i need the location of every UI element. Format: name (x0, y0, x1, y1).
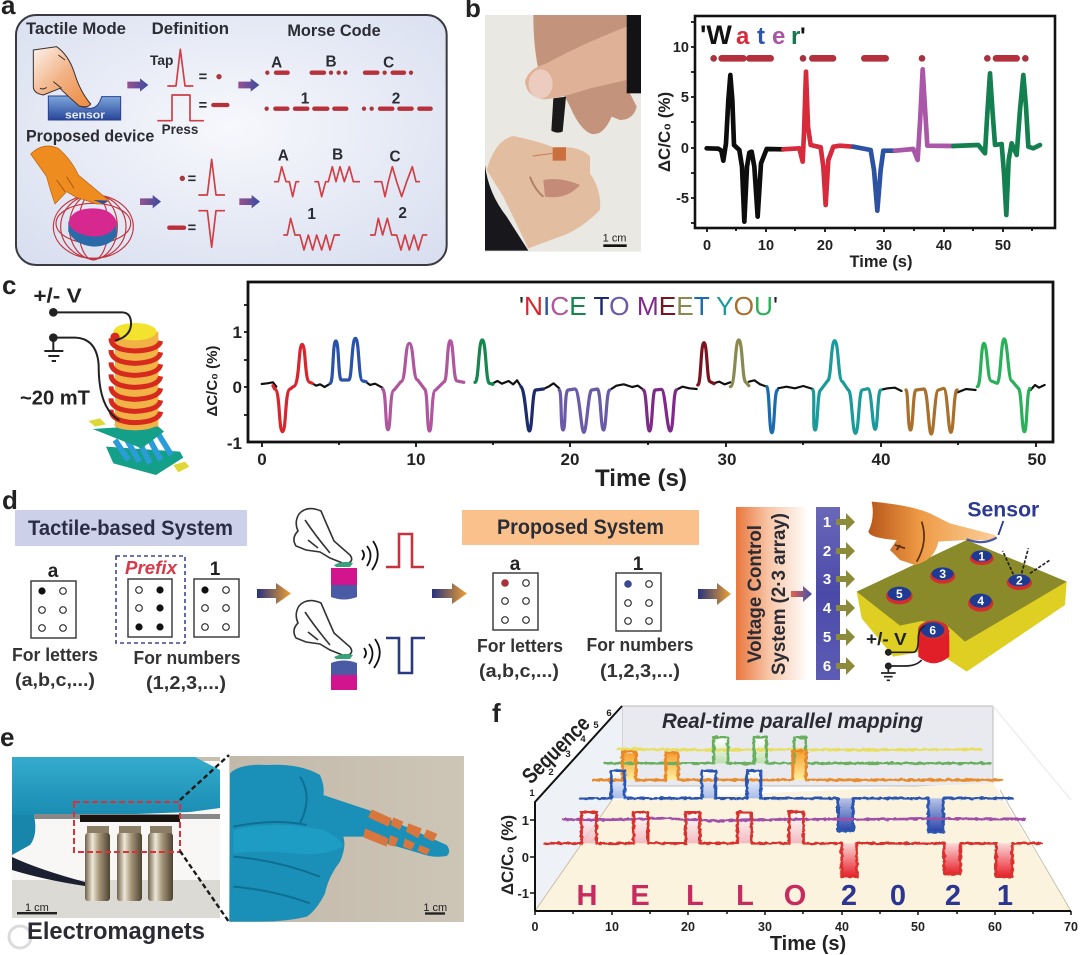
panel d: press and tap input illustration (294, 509, 425, 690)
panel d: proposed system (462, 510, 699, 681)
x tick labels: 40 (872, 450, 890, 469)
panel label d: d (2, 485, 18, 515)
proposed device definitions (169, 159, 225, 247)
Morse code dots and dashes: B (325, 54, 337, 71)
sequence tick labels: 1 (529, 788, 535, 799)
heading: Proposed device (26, 127, 154, 146)
panel d: voltage control system (736, 507, 809, 680)
sequence tick labels: 4 (580, 734, 586, 745)
x tick labels: 10 (407, 450, 425, 469)
y tick labels: 0 (233, 378, 242, 397)
sensors 1 to 5: 5 (896, 587, 903, 601)
letter a grid (493, 554, 538, 630)
panel d: channel bar 1 to 6 (816, 507, 855, 680)
floor edges (535, 790, 1071, 911)
y axis title: ΔC/C₀ (%) (498, 815, 517, 895)
signal traces (545, 737, 1041, 877)
chart frame (695, 16, 1055, 228)
arrow (257, 583, 291, 604)
base actuator (88, 418, 189, 475)
number labels 2021 (841, 880, 1013, 912)
x tick labels: 30 (758, 920, 772, 934)
numbers caption: For numbers (586, 634, 694, 655)
x axis tick labels: 50 (995, 238, 1011, 254)
Morse code dots and dashes: A (271, 54, 282, 71)
y tick labels (227, 323, 242, 453)
signal traces (707, 69, 1040, 222)
axis ticks (530, 820, 1071, 915)
word title: r (791, 23, 800, 50)
numbers range: (1,2,3,...) (146, 672, 226, 693)
x tick labels (532, 920, 1078, 934)
voltage label: +/- V (33, 285, 82, 307)
icon: magnet with field lines and hand (31, 146, 133, 260)
axes (535, 706, 1071, 911)
sequence tick labels: 3 (565, 749, 571, 760)
banner (15, 510, 247, 546)
panel b: hand photograph (485, 15, 641, 252)
x axis title: Time (s) (850, 253, 912, 271)
letter a grid: a (48, 561, 59, 582)
word labels HELLO: L (686, 880, 704, 912)
y axis tick labels: -5 (676, 191, 689, 207)
proposed device definitions: = (188, 221, 196, 237)
sensors 1 to 5: 2 (1016, 574, 1023, 588)
panel f: real-time mapping chart (498, 706, 1078, 955)
y axis title: ΔC/C₀ (%) (655, 92, 674, 172)
sensor 6 cylinder (918, 621, 949, 663)
x tick labels: 20 (681, 920, 695, 934)
headings (26, 19, 381, 40)
tap and press definitions (150, 49, 227, 137)
word title: 'NICE TO MEET YOU' (519, 291, 778, 321)
proposed Morse signals: A (278, 148, 289, 165)
sensors 1 to 5 (886, 549, 1032, 612)
panel d: channel bar 1 to 6: 4 (823, 600, 832, 617)
y tick labels: -1 (227, 434, 242, 453)
banner text: Proposed System (497, 516, 664, 539)
banner (462, 510, 699, 545)
proposed Morse signals: 1 (307, 206, 316, 223)
caption: Electromagnets (27, 918, 205, 945)
Morse code dots and dashes (264, 54, 431, 111)
letters caption: For letters (12, 644, 98, 665)
chart title: Real-time parallel mapping (662, 710, 923, 733)
zoom callout lines (180, 755, 229, 922)
tap and press definitions: Tap (150, 52, 173, 68)
word title: e (772, 23, 785, 50)
panel c: electromagnet device (20, 285, 189, 475)
number labels 2021: 1 (997, 880, 1013, 912)
Morse code dots and dashes: 1 (301, 90, 310, 107)
y tick labels: -1 (517, 886, 529, 901)
arrow (140, 195, 161, 208)
y tick labels: 1 (233, 323, 242, 342)
lower magnet (331, 654, 357, 690)
x tick labels: 50 (1028, 450, 1046, 469)
letters range: (a,b,c,...) (15, 669, 95, 690)
sensor label: Sensor (967, 498, 1039, 522)
scale bar: 1 cm (603, 233, 626, 245)
scale bar (17, 902, 57, 914)
x tick labels: 30 (718, 450, 736, 469)
x axis tick labels: 20 (817, 238, 833, 254)
number 1 grid (616, 554, 661, 631)
word labels HELLO: O (784, 880, 806, 912)
x tick labels (257, 450, 1046, 469)
x axis tick labels: 10 (758, 238, 774, 254)
x tick labels: 10 (605, 920, 619, 934)
sensor 6 cylinder: 6 (929, 623, 936, 637)
number labels 2021: 2 (945, 880, 961, 912)
proposed Morse signals: B (332, 147, 343, 164)
icon: pointing hand (868, 502, 996, 565)
icon: tactile hand on sensor: sensor (65, 109, 106, 121)
panel c: NICE TO MEET YOU chart (204, 282, 1053, 492)
number 1 grid: 1 (633, 554, 644, 575)
x axis title: Time (s) (595, 465, 687, 492)
letters caption: For letters (477, 635, 563, 656)
sequence tick labels: 6 (606, 708, 612, 719)
word title: 'W (700, 20, 732, 50)
negative pulse (386, 638, 425, 673)
proposed device definitions: = (188, 171, 196, 187)
number labels 2021: 2 (841, 880, 857, 912)
headings: Tactile Mode (26, 19, 126, 38)
axis ticks (244, 305, 1036, 447)
panel d: channel bar 1 to 6: 3 (823, 571, 831, 588)
panel d: tactile-based system (12, 510, 247, 693)
numbers range: (1,2,3,...) (600, 660, 680, 681)
word title: ' (800, 23, 806, 50)
x tick labels: 20 (561, 450, 579, 469)
sequence tick labels: 2 (548, 767, 554, 778)
word labels HELLO: H (577, 880, 597, 912)
wiring and ground (44, 309, 131, 420)
arrow (791, 586, 812, 602)
x tick labels: 0 (532, 920, 539, 934)
icon: tactile hand on sensor (33, 47, 121, 121)
number labels 2021: 0 (890, 880, 906, 912)
y axis tick labels: 0 (681, 141, 689, 157)
icon: signal waves (362, 541, 378, 570)
panel d: channel bar 1 to 6: 6 (823, 658, 831, 675)
panel label e: e (0, 722, 14, 752)
y tick labels: 1 (522, 813, 529, 828)
positive pulse (386, 534, 424, 567)
panel background (16, 15, 447, 265)
sensors 1 to 5: 4 (977, 594, 984, 608)
x tick labels: 40 (835, 920, 849, 934)
arrow (239, 195, 260, 208)
scale bar: 1 cm (25, 902, 49, 914)
panel d: voltage control system: Voltage Control (744, 525, 766, 663)
left wall (535, 706, 622, 911)
tap and press definitions: Press (162, 121, 199, 137)
x axis tick labels: 30 (876, 238, 892, 254)
red dashed highlight (74, 802, 180, 852)
proposed Morse signals: C (389, 148, 401, 165)
electromagnet cylinders (85, 826, 173, 901)
finger crease (895, 522, 924, 562)
number 1 grid: 1 (210, 559, 221, 580)
letters range: (a,b,c,...) (479, 660, 559, 681)
Morse code dots and dashes: C (383, 54, 394, 71)
back wall (622, 706, 993, 786)
floor (535, 783, 1071, 911)
coil and core (110, 323, 161, 430)
icon: signal waves (364, 639, 380, 668)
copper electrodes (363, 809, 437, 855)
wiring and ground (881, 626, 925, 680)
x axis tick labels: 40 (936, 238, 952, 254)
watermark (9, 926, 31, 948)
voltage label: +/- V (866, 629, 907, 649)
x axis title: Time (s) (770, 933, 846, 955)
panel d: voltage control system: System (2·3 array) (768, 513, 790, 675)
sensors 1 to 5: 3 (939, 567, 946, 581)
right perspective edge (993, 706, 1071, 800)
prefix grid: Prefix (125, 558, 178, 578)
tap and press definitions: = (199, 70, 207, 86)
sensor patch on fingertip (967, 538, 997, 542)
sensor pointer (998, 521, 1003, 535)
panel e: gloved finger photo (229, 756, 464, 922)
headings: Definition (152, 19, 229, 38)
x axis tick labels (703, 238, 1011, 254)
banner text: Tactile-based System (28, 517, 233, 540)
panel d: channel bar 1 to 6: 5 (823, 629, 831, 646)
icon: upper hand (294, 509, 352, 564)
y axis tick labels: 10 (673, 40, 689, 56)
axis ticks (691, 22, 1032, 232)
panel e: electromagnets photo (12, 757, 220, 918)
x tick labels: 50 (911, 920, 925, 934)
word title: t (757, 23, 765, 50)
word labels HELLO (577, 880, 806, 912)
pulse fills (581, 738, 1012, 877)
panel label c: c (2, 270, 16, 300)
word title: a (736, 23, 750, 50)
field arrows from sensor 2 (1003, 548, 1050, 574)
sequence axis title: Sequence (517, 711, 595, 789)
arrow (698, 583, 731, 605)
prefix grid (116, 556, 185, 643)
arrow (127, 78, 148, 92)
panel d: sensor array block (857, 498, 1067, 680)
y axis tick labels: 5 (681, 90, 689, 106)
y axis title: ΔC/C₀ (%) (204, 346, 221, 416)
letter a grid: a (510, 554, 521, 575)
Morse code dots and dashes: 2 (392, 90, 400, 107)
panel d: channel bar 1 to 6: 2 (823, 543, 831, 560)
headings: Morse Code (287, 21, 381, 40)
Morse code markers (710, 55, 1029, 62)
numbers caption: For numbers (134, 647, 240, 668)
arrow (432, 583, 467, 604)
field label: ~20 mT (20, 387, 90, 409)
panel d: channel bar 1 to 6: 1 (823, 514, 831, 531)
word labels HELLO: L (736, 880, 754, 912)
x tick labels: 0 (257, 450, 267, 469)
number 1 grid (194, 559, 239, 637)
sequence tick labels (529, 708, 612, 799)
letter a grid (31, 561, 76, 638)
panel label f: f (492, 698, 501, 728)
x tick labels: 70 (1064, 920, 1078, 934)
x axis tick labels: 0 (703, 238, 711, 254)
word labels HELLO: E (630, 880, 650, 912)
sensors 1 to 5: 1 (978, 549, 985, 563)
tap and press definitions: = (199, 98, 207, 114)
y tick labels: 0 (522, 850, 529, 865)
upper magnet (331, 562, 357, 600)
chart frame (248, 282, 1053, 442)
panel a: Morse code definitions (16, 15, 447, 265)
x tick labels: 60 (988, 920, 1002, 934)
sequence tick labels: 5 (593, 720, 599, 731)
proposed Morse signals (274, 147, 427, 250)
y axis tick labels (673, 40, 689, 207)
scale bar: 1 cm (423, 902, 447, 914)
panel b: Water capacitance chart (655, 16, 1055, 271)
signal traces (262, 338, 1045, 434)
y tick labels (517, 813, 529, 901)
arrow (238, 78, 259, 92)
proposed Morse signals: 2 (398, 205, 407, 222)
icon: lower hand (294, 601, 352, 656)
